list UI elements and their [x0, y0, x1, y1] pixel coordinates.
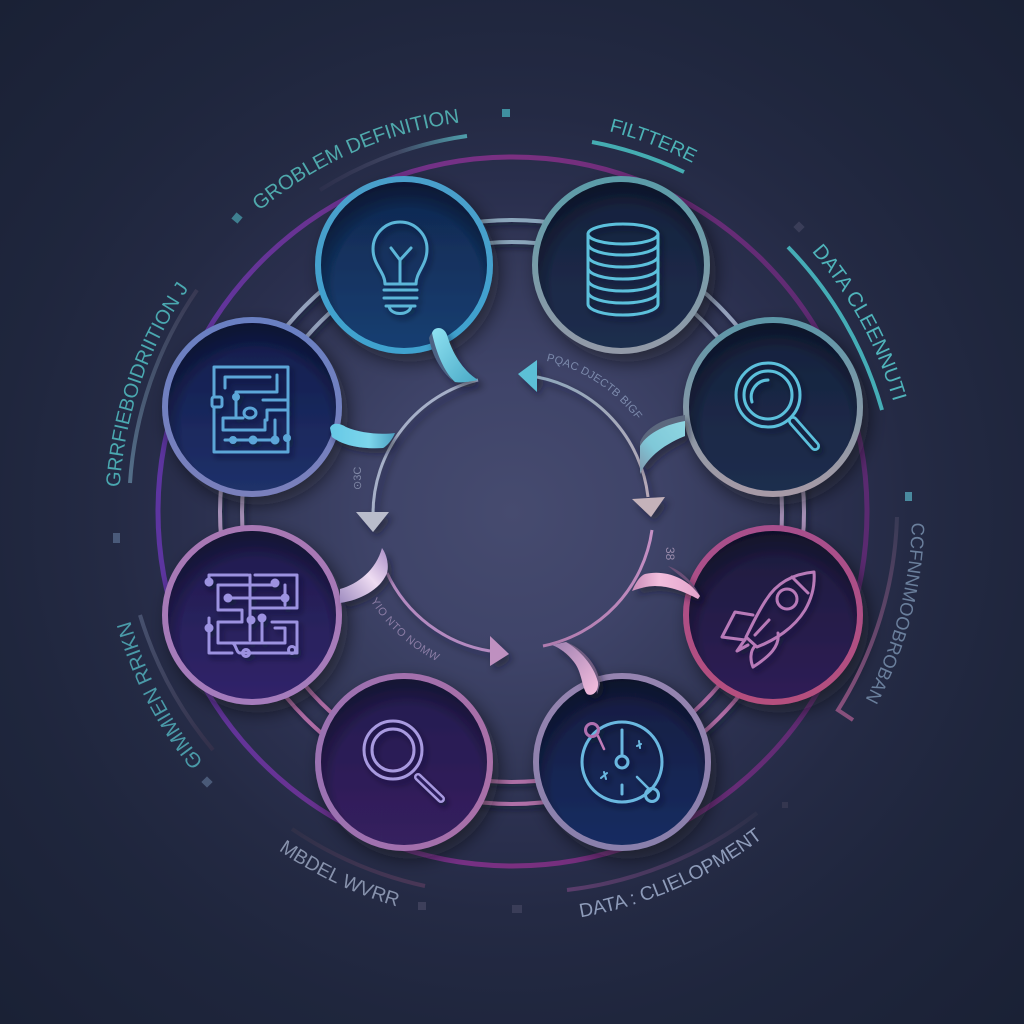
label: DATA : CLIELOPMENT: DATA : CLIELOPMENT — [580, 827, 759, 918]
connector rings between steps — [220, 220, 804, 804]
icon: magnifier — [736, 363, 815, 446]
node circle — [686, 320, 860, 494]
step: circuit maze purple — [165, 528, 339, 702]
arrow: top right — [518, 360, 665, 517]
step: database — [535, 179, 707, 351]
label: MBDEL WVRR — [280, 828, 426, 906]
step: magnifier purple — [318, 676, 490, 848]
ribbon: clock to arrow — [552, 642, 600, 695]
small caption: top arc: PQAC DJECTB BIGF — [547, 354, 642, 418]
outer purple ring — [158, 157, 867, 866]
icon: rocket — [722, 572, 814, 667]
arrow: bottom right — [543, 530, 652, 646]
icon: magnifier — [364, 721, 441, 799]
ribbon: rocket to arrow — [632, 566, 700, 599]
label: GROBLEM DEFINITION: GROBLEM DEFINITION — [254, 108, 458, 208]
icon: clock dial — [582, 722, 662, 802]
ribbon: blue circuit to arrow — [330, 424, 395, 448]
node circle — [318, 179, 490, 351]
node circle — [165, 528, 339, 702]
small caption: right: 38 — [663, 547, 677, 561]
label: CCFNNMOOBROBAN — [835, 517, 924, 722]
icon: circuit maze — [212, 367, 290, 452]
node circle — [686, 528, 860, 702]
central cycle arrows — [356, 360, 665, 666]
step: circuit maze blue — [165, 320, 339, 494]
arrow: bottom left — [387, 573, 509, 666]
ribbon: purple circuit to arrow — [340, 548, 388, 603]
node circle — [165, 320, 339, 494]
ribbon: bulb to arrow — [429, 328, 478, 382]
decorative markers — [113, 109, 912, 913]
step: clock — [536, 676, 708, 848]
label: DATA CLEENNUTI: DATA CLEENNUTI — [812, 244, 906, 400]
node circle — [535, 179, 707, 351]
node circle — [536, 676, 708, 848]
label: GRRFIEBOIDRIITION: GRRFIEBOIDRIITION J — [106, 282, 187, 486]
node circle — [318, 676, 490, 848]
step: lightbulb — [318, 179, 490, 351]
ribbon: magnifier to arrow — [640, 415, 685, 474]
label: FILTTERE: FILTTERE — [610, 118, 698, 163]
small caption: left: ⊙3C — [352, 467, 364, 490]
label: GIMMIEN RRIKN: GIMMIEN RRIKN — [117, 622, 200, 768]
step: magnifier teal — [686, 320, 860, 494]
step: rocket — [686, 528, 860, 702]
small caption: bottom-left arc: YIO NTO NOMW — [372, 596, 440, 660]
icon: database — [588, 224, 658, 315]
label: MBDEL WVRR: MBDEL WVRR — [280, 840, 398, 906]
icon: lightbulb — [373, 222, 427, 314]
label: CCFNNMOOBROBAN: CCFNNMOOBROBAN — [866, 524, 924, 704]
icon: circuit maze — [206, 575, 297, 656]
arrow: top left — [356, 380, 478, 532]
